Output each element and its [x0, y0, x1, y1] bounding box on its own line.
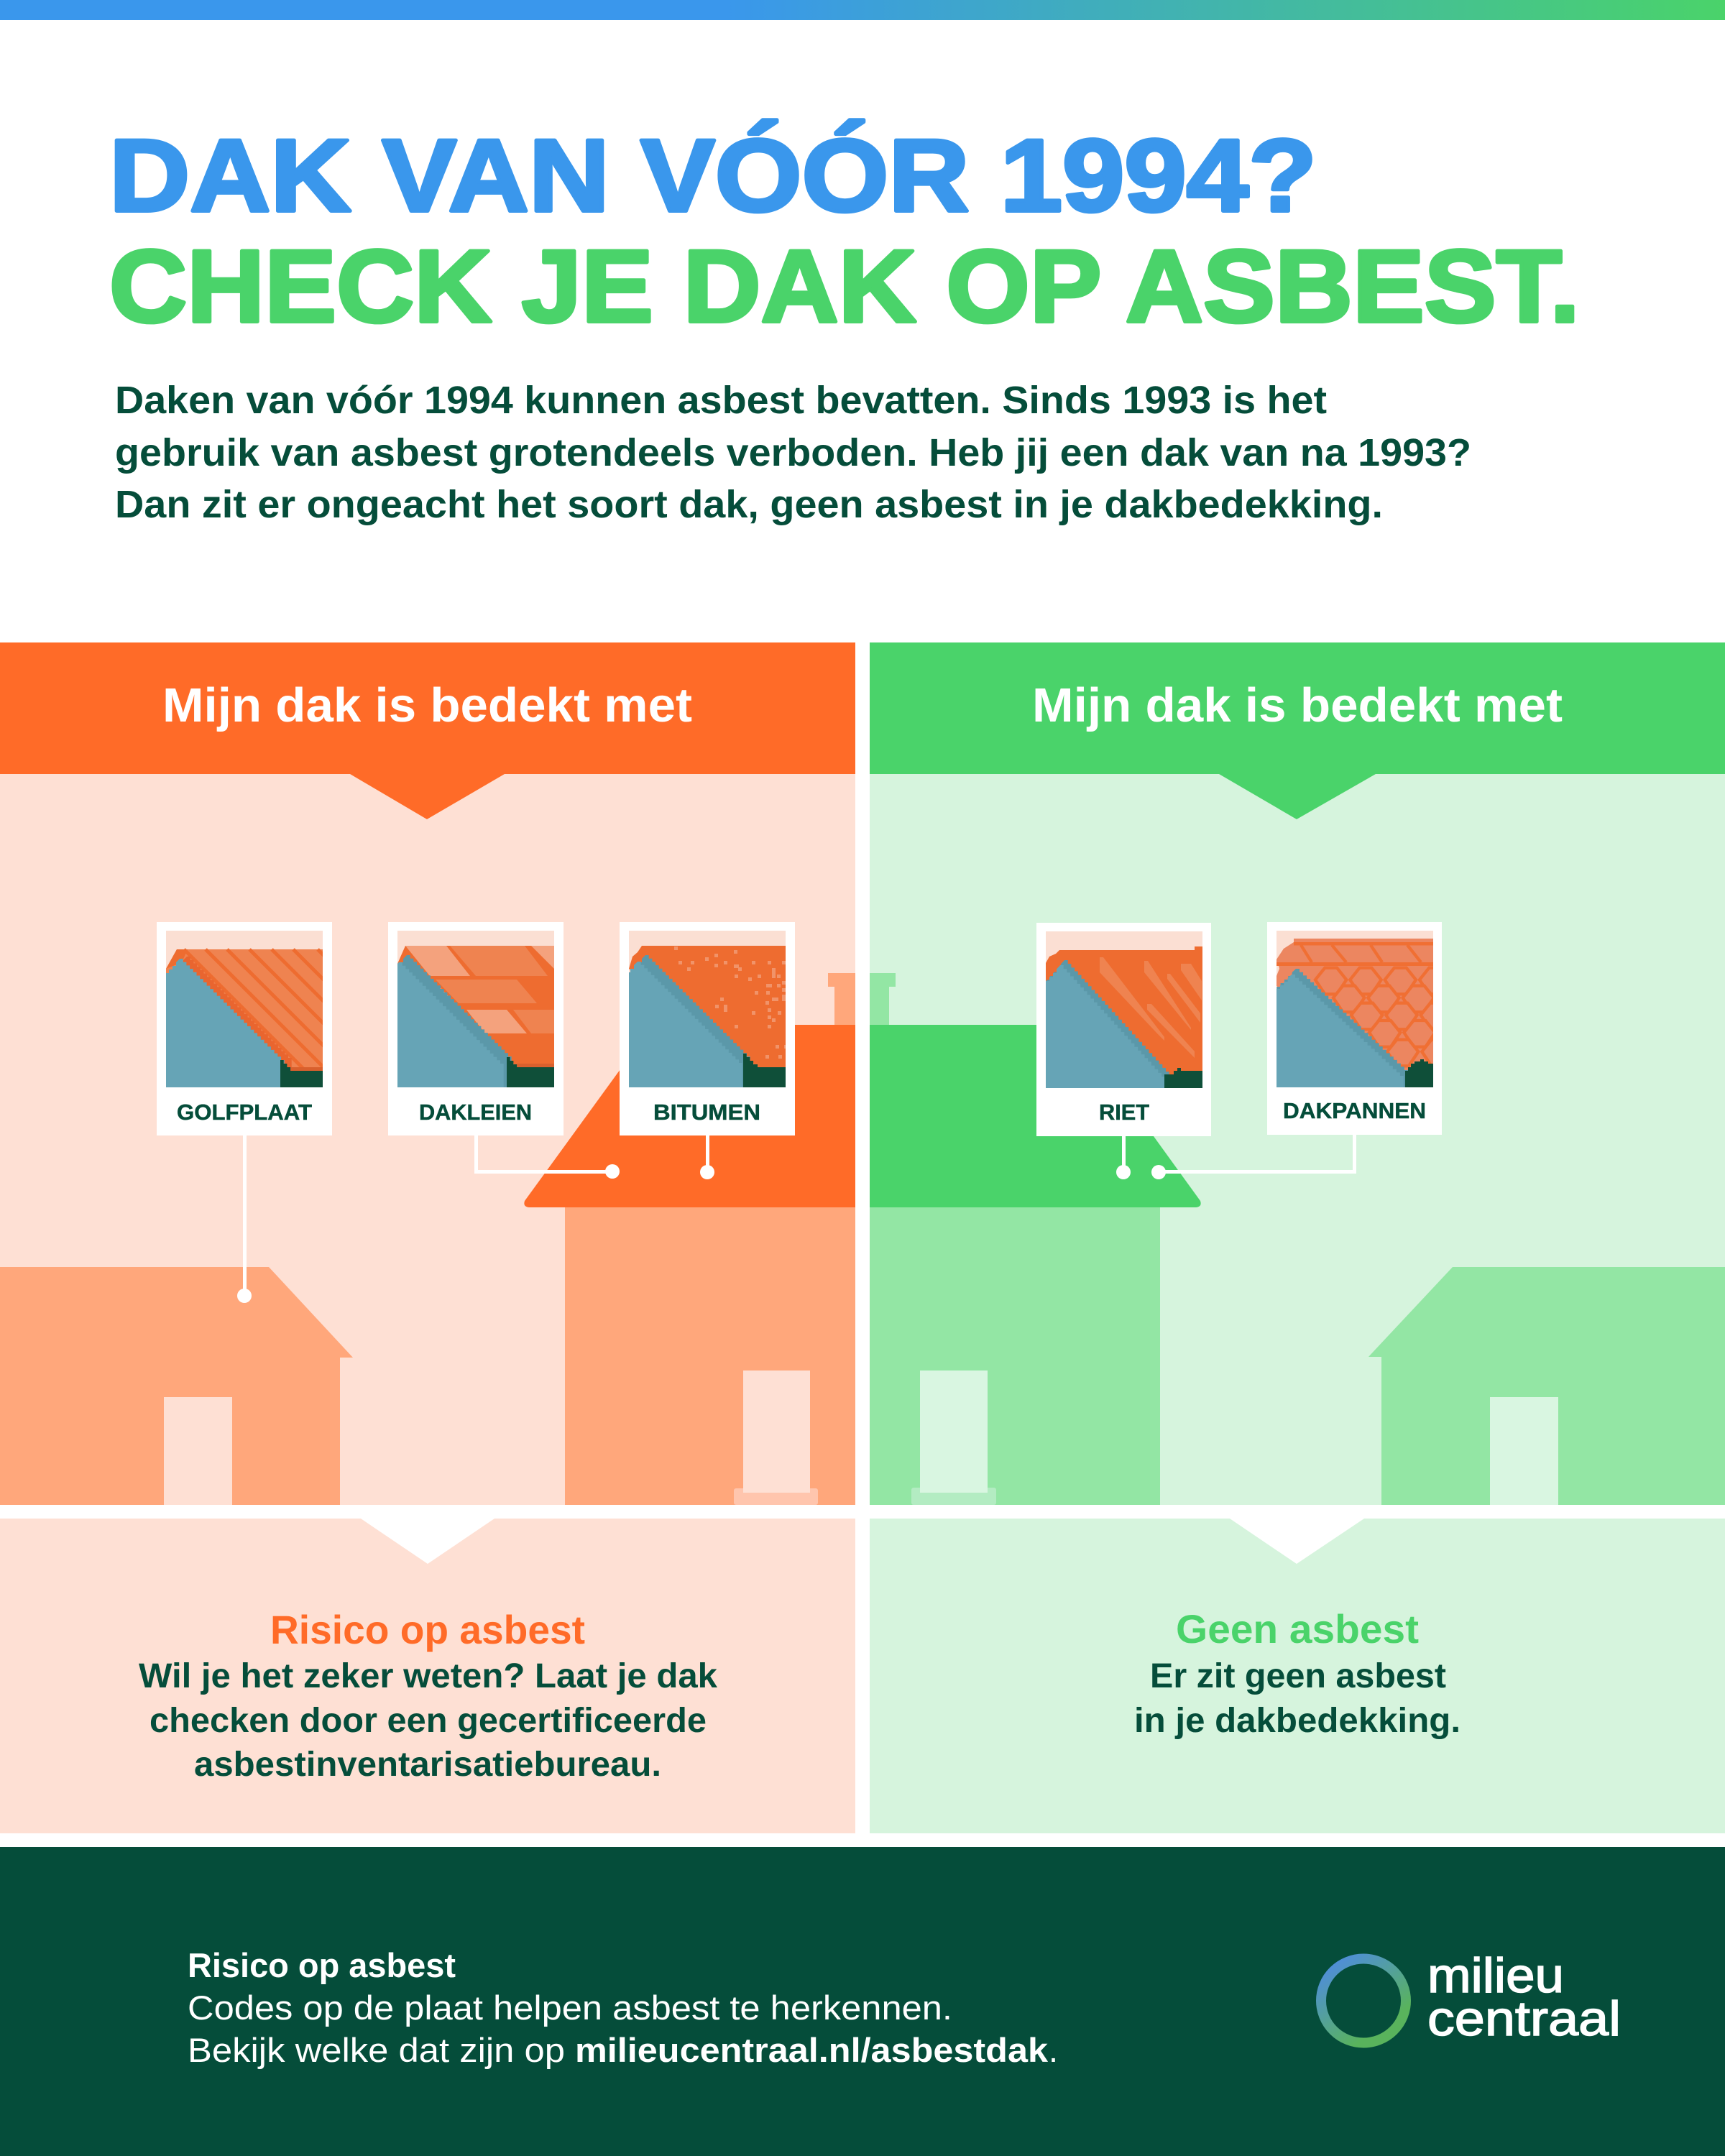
footer text: milieucentraal.nl/asbestdak — [575, 2031, 1049, 2069]
big house left half — [524, 973, 855, 1505]
result text: risk: Wil je het zeker weten? Laat je dak — [139, 1657, 717, 1695]
small house right — [1368, 1267, 1725, 1505]
white pointer lower left — [361, 1519, 494, 1564]
big house right half — [870, 973, 1201, 1505]
header text left: Mijn dak is bedekt met — [162, 678, 692, 732]
intro paragraph: Dan zit er ongeacht het soort dak, geen asbest in je dakbedekking. — [115, 483, 1383, 526]
intro paragraph: gebruik van asbest grotendeels verboden. Heb jij een dak van na 1993? — [115, 431, 1471, 474]
footer text: Risico op asbest — [188, 1946, 456, 1984]
logo: milieu centraal — [1321, 1948, 1621, 2046]
header: green — [870, 642, 1725, 819]
result text: no asbestos: Geen asbest — [1176, 1606, 1419, 1651]
connector: riet — [1116, 1132, 1131, 1179]
label: GOLFPLAAT — [177, 1100, 312, 1125]
connector: dakleien — [474, 1132, 620, 1179]
label: DAKPANNEN — [1283, 1098, 1426, 1123]
white pointer lower right — [1230, 1519, 1364, 1564]
card: dakpannen — [1267, 922, 1442, 1135]
small house left — [0, 1267, 353, 1505]
card: dakleien — [388, 922, 564, 1135]
title — [109, 119, 1580, 344]
intro paragraph: Daken van vóór 1994 kunnen asbest bevatten. Sinds 1993 is het — [115, 379, 1327, 422]
card: riet — [1036, 923, 1211, 1136]
header: orange — [0, 642, 855, 819]
footer text — [188, 1946, 1058, 2069]
label: DAKLEIEN — [419, 1100, 532, 1125]
top gradient bar — [0, 0, 1725, 20]
footer band — [0, 1847, 1725, 2156]
card: bitumen — [602, 922, 795, 1135]
result text: no asbestos: in je dakbedekking. — [1134, 1702, 1460, 1740]
image: golfplaat roof — [166, 931, 323, 1087]
connector: golfplaat — [237, 1132, 252, 1303]
header text right: Mijn dak is bedekt met — [1032, 678, 1563, 732]
label: RIET — [1099, 1100, 1149, 1125]
intro paragraph — [115, 379, 1471, 526]
panel: no asbestos (green) — [870, 642, 1725, 1833]
image: dakpannen roof — [1276, 931, 1433, 1087]
image: riet roof — [1046, 931, 1202, 1088]
image: bitumen roof — [629, 931, 786, 1087]
result text: risk: asbestinventarisatiebureau. — [194, 1746, 661, 1784]
logo wordmark — [1427, 1948, 1621, 2046]
footer text: . — [1049, 2031, 1058, 2069]
title: DAK VAN VÓÓR 1994? — [109, 119, 1317, 233]
logo wordmark: centraal — [1427, 1991, 1621, 2046]
panel: risk (orange) — [0, 642, 855, 1833]
result text: no asbestos: Er zit geen asbest — [1150, 1657, 1446, 1695]
result text: risk: checken door een gecertificeerde — [150, 1702, 707, 1740]
connector: bitumen — [700, 1132, 714, 1179]
image: dakleien roof — [397, 931, 554, 1087]
connector: dakpannen — [1151, 1132, 1356, 1179]
footer text: Codes op de plaat helpen asbest te herkennen. — [188, 1989, 952, 2027]
result text: no asbestos — [1134, 1606, 1460, 1740]
title: CHECK JE DAK OP ASBEST. — [109, 230, 1580, 344]
card: golfplaat — [157, 922, 332, 1135]
footer text: Bekijk welke dat zijn op — [188, 2031, 565, 2069]
logo ring — [1321, 1959, 1406, 2042]
result text: risk — [139, 1607, 717, 1784]
logo wordmark: milieu — [1427, 1948, 1564, 2003]
result text: risk: Risico op asbest — [270, 1607, 585, 1652]
label: BITUMEN — [653, 1100, 760, 1125]
